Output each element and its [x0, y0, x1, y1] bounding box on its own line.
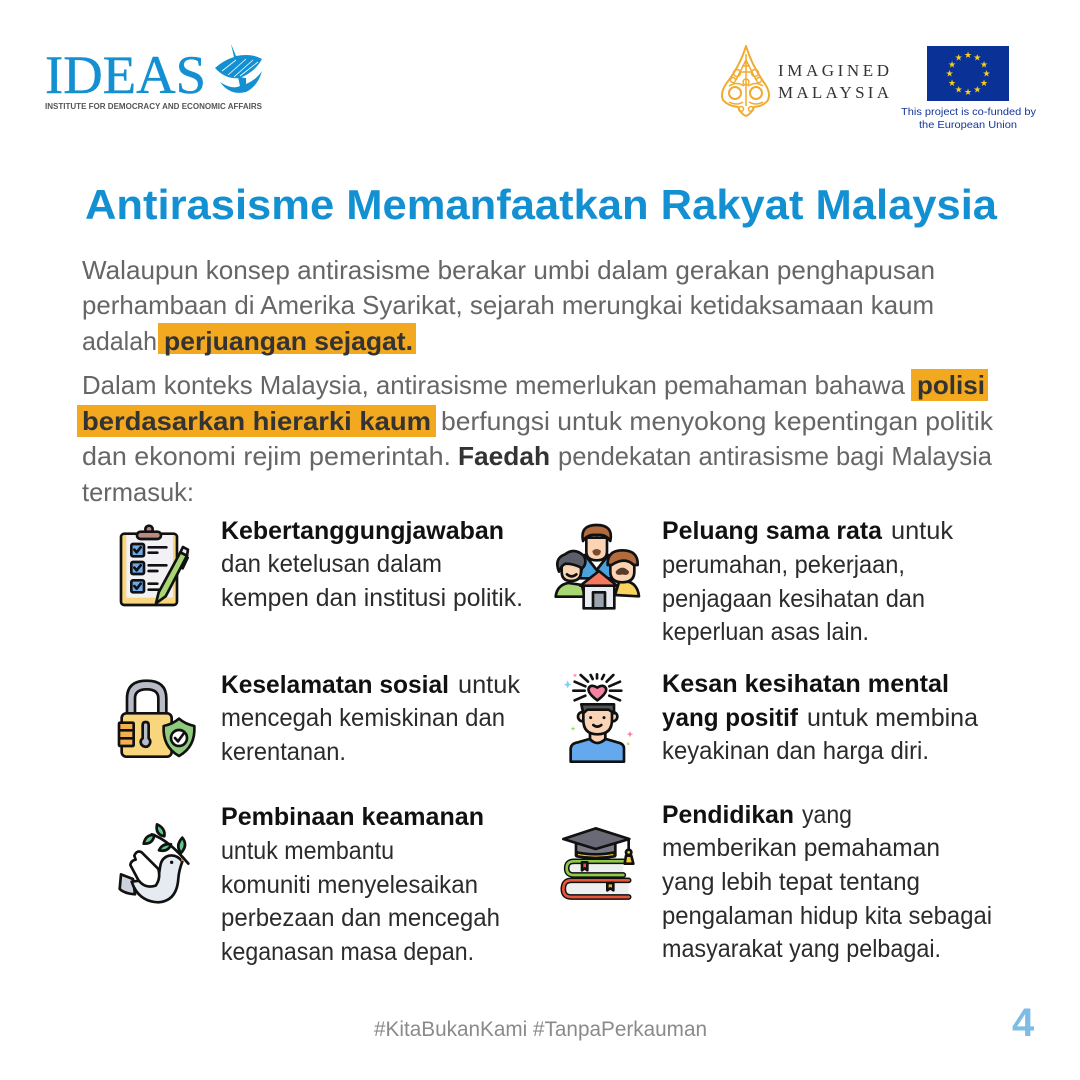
logo: EU flag: ★: [973, 85, 981, 95]
text block: Malaysian context: polisi: [917, 370, 985, 400]
icon: dove with olive branch: [120, 824, 188, 902]
benefit: Peluang sama rata: Peluang sama rata: [662, 517, 883, 545]
EU funding note: This project is co-funded by: [901, 106, 1037, 118]
benefit: Kebertanggungjawaban: Kebertanggungjawaban: [221, 517, 504, 545]
logo: IDEAS: INSTITUTE FOR DEMOCRACY AND ECONOMIC AFFAIRS: [45, 102, 263, 111]
icon: gunungan: [722, 46, 769, 116]
logo: EU flag: ★: [948, 59, 956, 69]
benefit: Kesan kesihatan mental: yang positif: [662, 704, 799, 732]
logo: Imagined Malaysia: [722, 46, 890, 116]
icon: person with heart: [564, 674, 633, 762]
benefit: Keselamatan sosial: [221, 671, 520, 766]
logo: EU flag: ★: [982, 69, 991, 79]
logo: EU flag: ★: [955, 53, 963, 63]
logo: EU flag: ★: [973, 53, 981, 63]
benefit: Kesan kesihatan mental: [662, 670, 978, 765]
highlight: perjuangan sejagat: [158, 323, 416, 354]
text block: Malaysian context: Faedah: [458, 441, 550, 471]
benefit: Kebertanggungjawaban: kempen dan institusi politik.: [221, 584, 523, 612]
benefit: Peluang sama rata: perumahan, pekerjaan,: [662, 551, 905, 579]
benefit: Pembinaan keamanan: komuniti menyelesaikan: [221, 871, 478, 899]
logo: Imagined Malaysia: IMAGINED: [778, 61, 889, 80]
text block: Malaysian context: pendekatan antirasisme bagi Malaysia: [558, 441, 993, 471]
text block: Malaysian context: berfungsi untuk menyokong kepentingan politik: [441, 406, 994, 436]
icon: clipboard and pen: [121, 526, 188, 605]
logo: EU flag: ★: [948, 78, 956, 88]
benefit: Pendidikan: pengalaman hidup kita sebagai: [662, 902, 992, 930]
benefit: Peluang sama rata: [662, 517, 953, 646]
icon: books and graduation cap: [563, 828, 633, 897]
benefit: Kesan kesihatan mental: untuk membina: [807, 704, 978, 732]
hashtags: #KitaBukanKami #TanpaPerkauman: [374, 1018, 707, 1041]
benefit: Kebertanggungjawaban: dan ketelusan dalam: [221, 550, 442, 578]
text block: introduction: perjuangan sejagat.: [164, 326, 413, 356]
icon: padlock and shield: [119, 681, 194, 757]
EU funding note: [901, 106, 1037, 131]
EU funding note: the European Union: [919, 119, 1017, 131]
benefit: Pendidikan: Pendidikan: [662, 801, 794, 829]
text block: Malaysian context: berdasarkan hierarki kaum: [82, 406, 431, 436]
logo: EU flag: ★: [980, 78, 988, 88]
logo: IDEAS: [45, 44, 263, 111]
page number: 4: [1012, 1001, 1035, 1045]
benefit: Pendidikan: memberikan pemahaman: [662, 834, 940, 862]
logo: EU flag: [927, 46, 1009, 101]
benefit: Pembinaan keamanan: untuk membantu: [221, 837, 394, 865]
text block: introduction: perhambaan di Amerika Syarikat, sejarah merungkai ketidaksamaan kaum: [82, 290, 934, 320]
logo: EU flag: ★: [964, 50, 972, 60]
text block: introduction: adalah: [82, 326, 157, 356]
title: Antirasisme Memanfaatkan Rakyat Malaysia: [85, 181, 998, 228]
text block: Malaysian context: dan ekonomi rejim pemerintah.: [82, 441, 451, 471]
benefit: Keselamatan sosial: untuk: [458, 671, 520, 699]
benefit: Peluang sama rata: keperluan asas lain.: [662, 618, 869, 646]
benefit: Pembinaan keamanan: [221, 803, 500, 966]
benefit: Kebertanggungjawaban: [221, 517, 523, 612]
highlight: berdasarkan hierarki kaum: [77, 405, 436, 437]
benefit: Kesan kesihatan mental: keyakinan dan harga diri.: [662, 737, 929, 765]
benefit: Pendidikan: masyarakat yang pelbagai.: [662, 935, 941, 963]
benefit: Peluang sama rata: penjagaan kesihatan dan: [662, 585, 925, 613]
text block: Malaysian context: termasuk:: [82, 477, 194, 507]
benefit: Pembinaan keamanan: perbezaan dan mencegah: [221, 904, 500, 932]
logo: Imagined Malaysia: MALAYSIA: [778, 83, 890, 102]
benefit: Peluang sama rata: untuk: [891, 517, 953, 545]
text block: Malaysian context: [77, 369, 994, 507]
benefit: Pendidikan: [662, 801, 992, 963]
benefit: Pendidikan: yang lebih tepat tentang: [662, 868, 920, 896]
benefit: Pembinaan keamanan: Pembinaan keamanan: [221, 803, 484, 831]
text block: introduction: Walaupun konsep antirasisme berakar umbi dalam gerakan penghapusan: [82, 255, 935, 285]
highlight: polisi: [911, 369, 988, 401]
benefit: Keselamatan sosial: mencegah kemiskinan dan: [221, 704, 505, 732]
text block: Malaysian context: Dalam konteks Malaysia, antirasisme memerlukan pemahaman bahawa: [82, 370, 906, 400]
logo: EU flag: ★: [945, 69, 954, 79]
logo: EU flag: ★: [980, 59, 988, 69]
benefit: Keselamatan sosial: kerentanan.: [221, 738, 346, 766]
benefit: Pembinaan keamanan: keganasan masa depan.: [221, 938, 474, 966]
logo: IDEAS: IDEAS: [45, 45, 206, 105]
benefit: Kesan kesihatan mental: Kesan kesihatan mental: [662, 670, 949, 698]
benefit: Keselamatan sosial: Keselamatan sosial: [221, 671, 449, 699]
text block: introduction: [82, 255, 935, 356]
benefit: Pendidikan: yang: [802, 801, 852, 829]
icon: family and house: [556, 525, 639, 608]
logo: EU flag: ★: [964, 87, 972, 97]
logo: EU flag: ★: [955, 85, 963, 95]
